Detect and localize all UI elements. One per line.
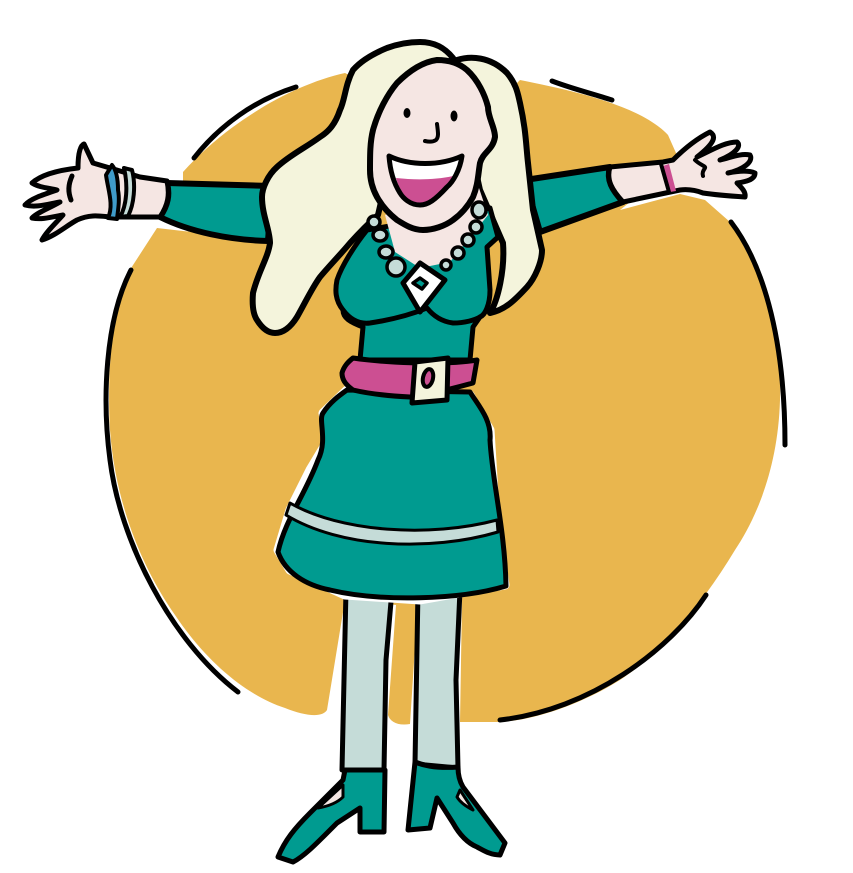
hand crease	[695, 160, 705, 176]
pendant	[403, 263, 445, 312]
bust line	[343, 308, 480, 323]
left leg	[342, 590, 392, 770]
wristband	[663, 164, 676, 192]
left arm and hand	[25, 144, 272, 241]
neck	[385, 185, 488, 268]
nose	[425, 124, 438, 142]
belt	[342, 358, 477, 403]
left sleeve	[160, 183, 272, 241]
eyes	[404, 108, 410, 118]
thumb crease	[69, 176, 72, 200]
dress bodice	[336, 208, 498, 360]
shoes	[278, 762, 505, 862]
belt buckle	[412, 358, 448, 403]
mouth outline	[389, 156, 462, 205]
hair back right	[457, 58, 542, 313]
left hand	[25, 144, 168, 240]
face	[370, 60, 495, 230]
right hand	[609, 132, 755, 202]
dress skirt	[278, 390, 506, 598]
skirt trim band	[286, 503, 498, 544]
yellow circle background	[106, 73, 785, 725]
right sleeve	[525, 167, 623, 232]
circle outline strokes	[106, 81, 785, 720]
shoe cut-outs	[318, 785, 343, 808]
tongue	[396, 176, 453, 204]
legs	[342, 590, 460, 770]
white halo behind dress	[278, 390, 505, 600]
right shoe	[408, 762, 505, 855]
mouth	[389, 156, 462, 205]
right arm and hand	[525, 132, 755, 232]
left shoe	[278, 770, 385, 862]
necklace	[368, 202, 486, 312]
bracelets	[106, 165, 119, 219]
hair front left	[253, 42, 453, 333]
right leg	[415, 590, 460, 768]
